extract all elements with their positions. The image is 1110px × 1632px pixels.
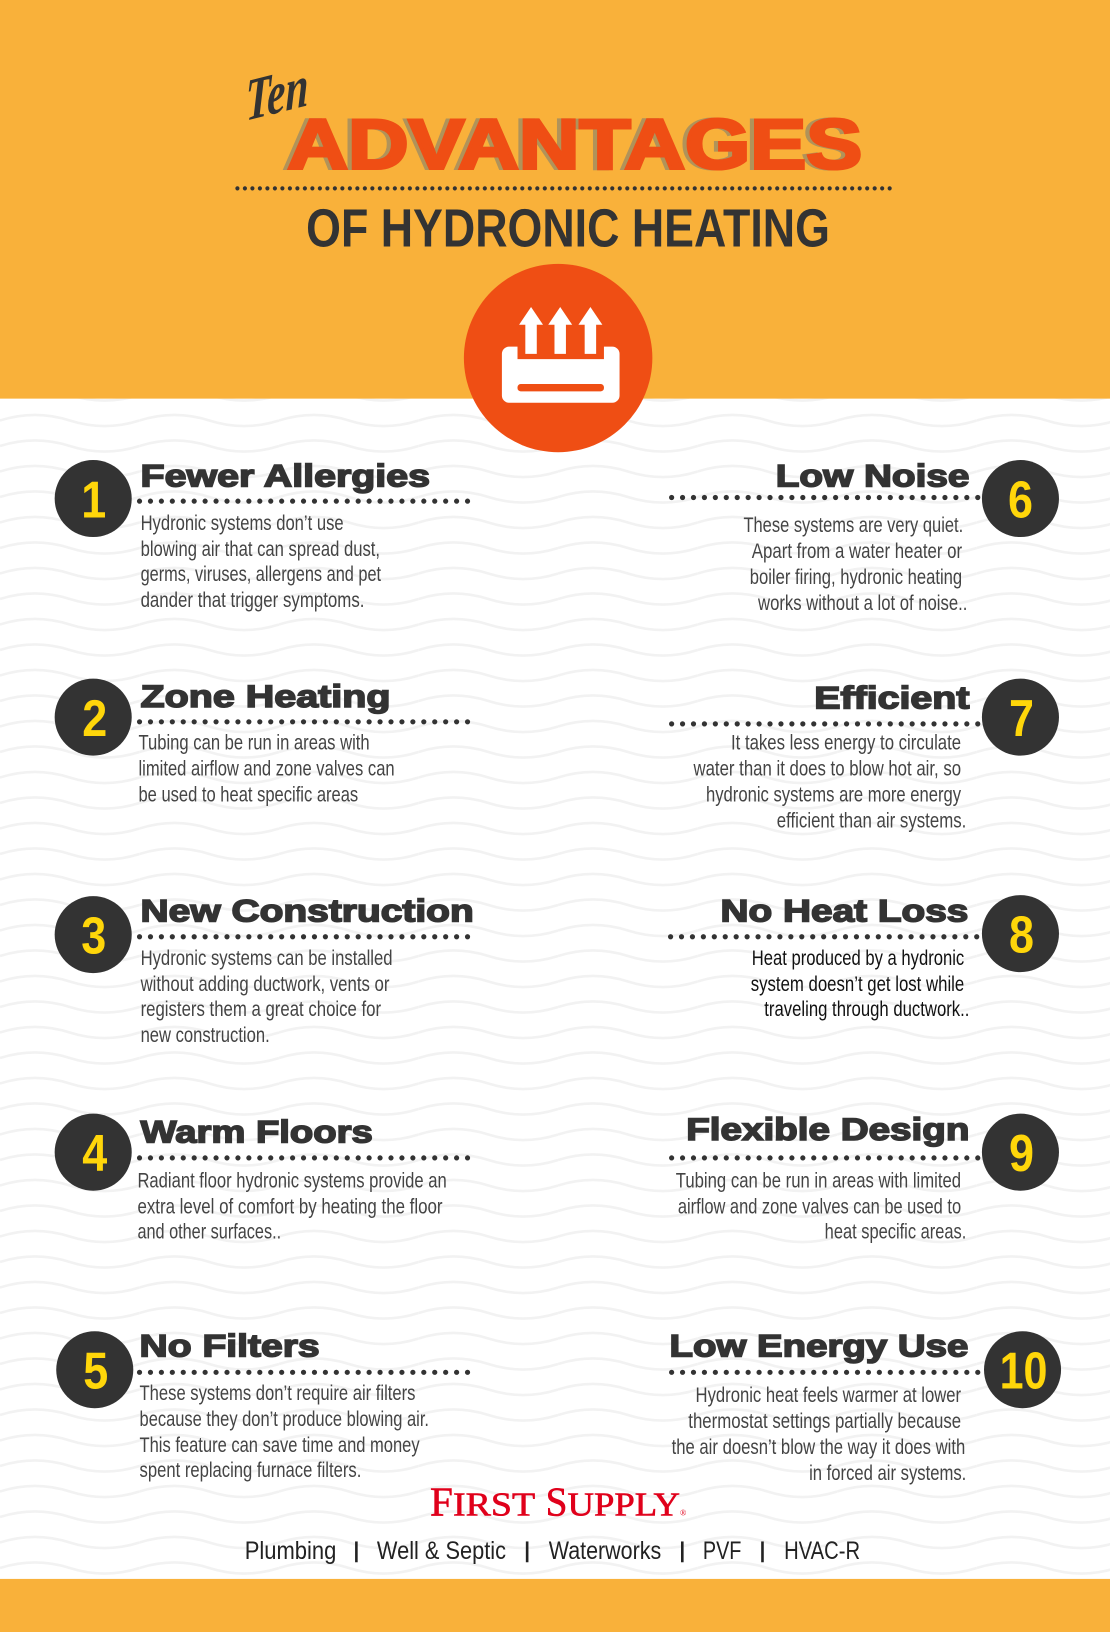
logo: First Supply: S bbox=[546, 1479, 567, 1525]
panel: advantage 4: Radiant floor hydronic systems provide an bbox=[137, 1170, 447, 1193]
panel: advantage 1 bbox=[55, 458, 471, 612]
logo: First Supply: IRST bbox=[453, 1485, 535, 1523]
panel: advantage 3 bbox=[55, 893, 474, 1047]
logo: First Supply: UPPLY bbox=[567, 1485, 680, 1523]
panel: advantage 10 bbox=[670, 1328, 1061, 1485]
panel: advantage 6: works without a lot of noise.. bbox=[757, 592, 967, 615]
panel: advantage 7: efficient than air systems. bbox=[777, 809, 966, 832]
panel: advantage 5: 5 bbox=[83, 1342, 108, 1400]
panel: advantage 6: 6 bbox=[1008, 471, 1033, 529]
panel: advantage 5 bbox=[56, 1328, 471, 1482]
footer band bbox=[0, 1579, 1110, 1632]
panel: advantage 2: be used to heat specific areas bbox=[138, 783, 358, 806]
panel: advantage 10: in forced air systems. bbox=[809, 1462, 966, 1485]
title: ADVANTAGES: ADVANTAGES bbox=[287, 106, 862, 185]
panel: advantage 10: 10 bbox=[1000, 1342, 1048, 1400]
panel: advantage 3: new construction. bbox=[141, 1024, 270, 1047]
title: of hydronic heating: OF HYDRONIC HEATING bbox=[306, 199, 830, 259]
footer: business lines: Waterworks bbox=[549, 1537, 661, 1565]
panel: advantage 2: 2 bbox=[82, 690, 107, 748]
panel: advantage 7 bbox=[672, 679, 1059, 832]
panel: advantage 3: Hydronic systems can be installed bbox=[141, 947, 393, 970]
panel: advantage 8 bbox=[671, 893, 1059, 1021]
panel: advantage 7: water than it does to blow hot air, so bbox=[693, 757, 961, 780]
panel: advantage 7: It takes less energy to circulate bbox=[731, 731, 961, 754]
panel: advantage 9 bbox=[672, 1111, 1059, 1244]
panel: advantage 8: No Heat Loss bbox=[721, 893, 968, 929]
panel: advantage 4: extra level of comfort by heating the floor bbox=[137, 1196, 443, 1219]
panel: advantage 3: 3 bbox=[81, 907, 106, 965]
panel: advantage 5: This feature can save time and money bbox=[140, 1434, 420, 1457]
footer: business lines: Plumbing bbox=[245, 1537, 336, 1565]
panel: advantage 6: boiler firing, hydronic heating bbox=[750, 566, 962, 589]
logo: First Supply bbox=[430, 1479, 686, 1525]
logo: First Supply: ® bbox=[680, 1508, 686, 1517]
panel: advantage 1: blowing air that can spread dust, bbox=[141, 538, 380, 561]
panel: advantage 9: Flexible Design bbox=[686, 1111, 969, 1147]
panel: advantage 3: New Construction bbox=[141, 893, 474, 929]
panel: advantage 5: No Filters bbox=[140, 1328, 320, 1364]
panel: advantage 8: system doesn’t get lost while bbox=[751, 973, 964, 996]
panel: advantage 1: germs, viruses, allergens and pet bbox=[141, 563, 381, 586]
footer: business lines: Well & Septic bbox=[377, 1537, 506, 1565]
panel: advantage 4: 4 bbox=[82, 1125, 107, 1183]
footer: business lines: PVF bbox=[703, 1537, 741, 1565]
panel: advantage 1: dander that trigger symptoms. bbox=[141, 589, 364, 612]
panel: advantage 1: 1 bbox=[81, 471, 106, 529]
panel: advantage 7: 7 bbox=[1009, 690, 1034, 748]
panel: advantage 3: without adding ductwork, vents or bbox=[140, 973, 389, 996]
panel: advantage 6: Apart from a water heater or bbox=[752, 540, 962, 563]
footer: business lines: HVAC-R bbox=[784, 1537, 860, 1565]
panel: advantage 4: and other surfaces.. bbox=[137, 1221, 281, 1244]
panel: advantage 5: These systems don’t require air filters bbox=[140, 1382, 415, 1405]
panel: advantage 3: registers them a great choice for bbox=[141, 998, 381, 1021]
title bbox=[237, 51, 894, 259]
header band bbox=[0, 0, 1110, 399]
panel: advantage 9: 9 bbox=[1009, 1125, 1034, 1183]
title script: Ten: Ten bbox=[246, 51, 308, 134]
panel: advantage 8: 8 bbox=[1009, 906, 1034, 964]
panel: advantage 8: Heat produced by a hydronic bbox=[752, 947, 964, 970]
panel: advantage 5: spent replacing furnace filters. bbox=[140, 1459, 361, 1482]
panel: advantage 10: Low Energy Use bbox=[670, 1328, 968, 1364]
panel: advantage 2: Zone Heating bbox=[141, 678, 390, 714]
panel: advantage 10: the air doesn’t blow the way it does with bbox=[672, 1436, 965, 1459]
panel: advantage 9: heat specific areas. bbox=[825, 1221, 966, 1244]
logo: First Supply: F bbox=[430, 1479, 453, 1525]
panel: advantage 1: Hydronic systems don’t use bbox=[141, 512, 344, 535]
panel: advantage 1: Fewer Allergies bbox=[141, 458, 430, 494]
panel: advantage 4: Warm Floors bbox=[141, 1113, 373, 1149]
icon: radiator with heat arrows bbox=[464, 264, 652, 452]
panel: advantage 6 bbox=[672, 458, 1059, 615]
panel: advantage 10: Hydronic heat feels warmer at lower bbox=[696, 1384, 961, 1407]
footer: business lines bbox=[245, 1537, 860, 1565]
panel: advantage 4 bbox=[55, 1113, 471, 1244]
title: ADVANTAGES shadow: ADVANTAGES bbox=[283, 106, 858, 185]
panel: advantage 6: Low Noise bbox=[776, 458, 969, 494]
panel: advantage 2: Tubing can be run in areas with bbox=[138, 731, 370, 754]
panel: advantage 2: limited airflow and zone valves can bbox=[138, 757, 395, 780]
panel: advantage 7: Efficient bbox=[814, 679, 970, 715]
panel: advantage 5: because they don’t produce blowing air. bbox=[140, 1408, 429, 1431]
panel: advantage 9: Tubing can be run in areas with limited bbox=[676, 1170, 961, 1193]
panel: advantage 6: These systems are very quiet. bbox=[743, 514, 963, 537]
panel: advantage 9: airflow and zone valves can be used to bbox=[678, 1196, 961, 1219]
panel: advantage 8: traveling through ductwork.. bbox=[764, 998, 969, 1021]
panel: advantage 2 bbox=[55, 678, 471, 806]
panel: advantage 7: hydronic systems are more energy bbox=[706, 783, 962, 806]
panel: advantage 10: thermostat settings partially because bbox=[688, 1410, 961, 1433]
